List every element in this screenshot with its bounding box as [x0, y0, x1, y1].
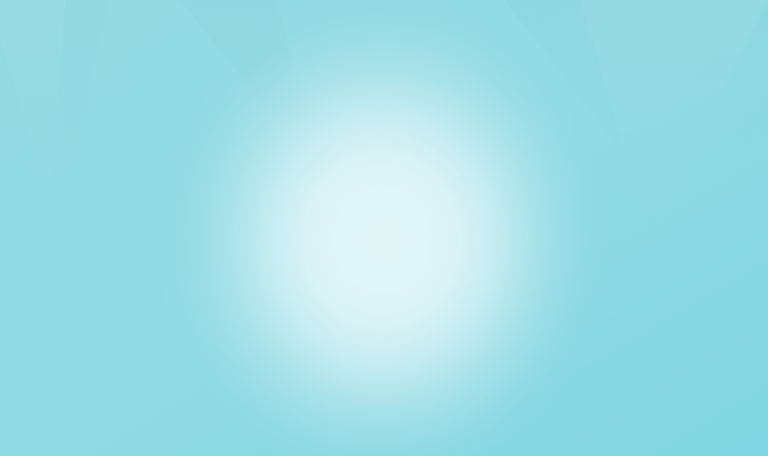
decorative facets: [0, 0, 768, 240]
